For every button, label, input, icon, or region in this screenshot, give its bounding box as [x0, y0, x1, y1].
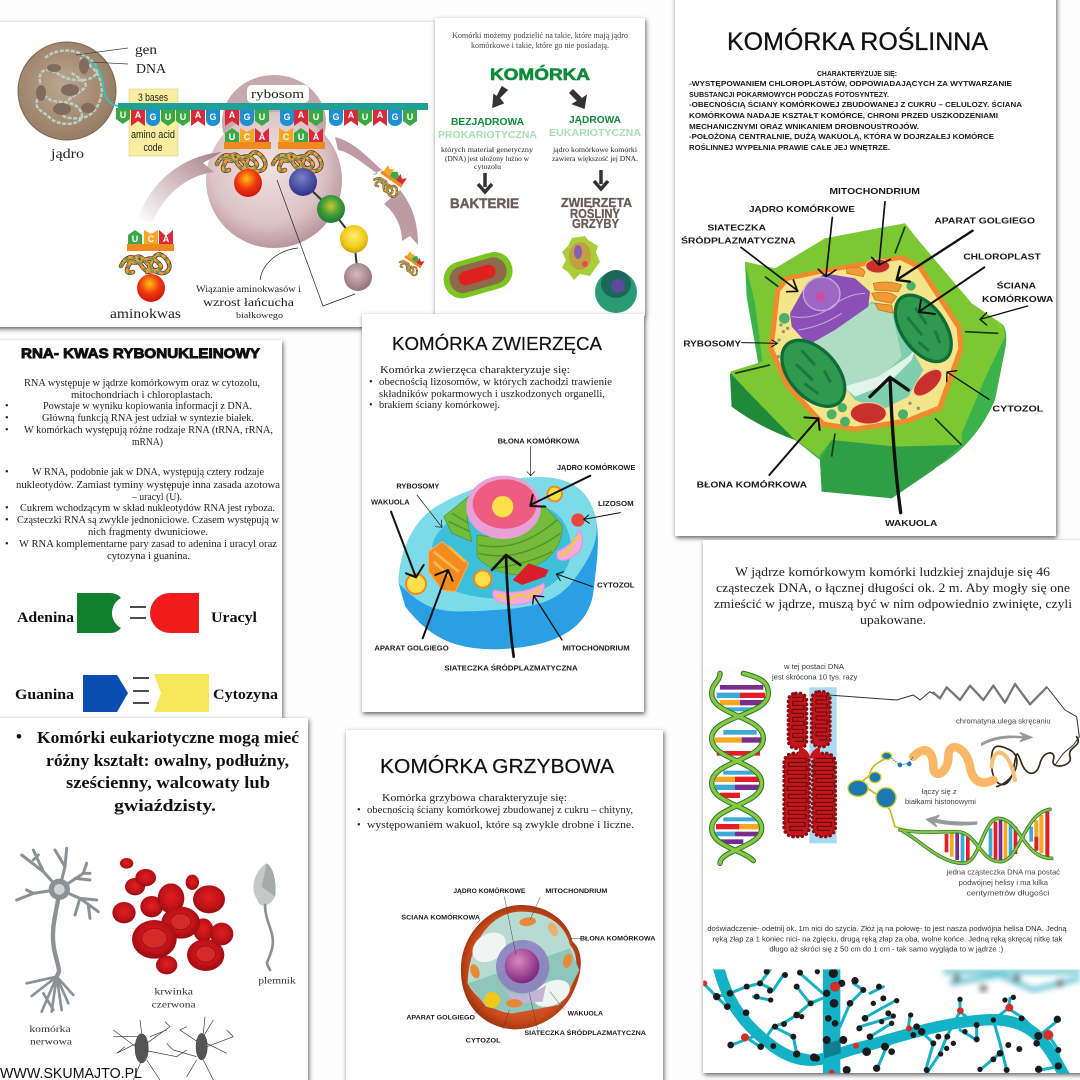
tRNA free amino acid [121, 230, 174, 302]
arrow: to bacteria [478, 173, 492, 192]
description: -POŁOŻONĄ CENTRALNIE, DUŻĄ WAKUOLĄ, KTÓRA W DOJRZAŁEJ KOMÓRCE [689, 132, 994, 141]
arrow: amino acid entering ribosome [138, 152, 222, 222]
organelle: vacuole light [808, 303, 902, 387]
text: experiment: długo aż skróci się z 50 cm do 1 cm - tak samo wygląda to w jądrze :) [769, 945, 1003, 954]
label: red blood cell: czerwona [152, 999, 197, 1010]
branch: eukaryotic: JĄDROWA [569, 115, 621, 126]
callout: chain bracket text [196, 180, 355, 320]
branch: prokaryotic: (DNA) jest ułożony luźno w [445, 154, 530, 163]
icon: sperm [253, 863, 276, 970]
organelle: golgi [484, 992, 500, 1008]
diagrams: cell types [17, 848, 296, 1080]
description: • [369, 377, 373, 388]
labels: SIATECZKA ŚRÓDPLAZMATYCZNA [444, 664, 578, 673]
branch: prokaryotic [438, 117, 537, 171]
label: rybosom: rybosom [251, 86, 304, 101]
panel: animal cell [362, 314, 644, 712]
diagram: fungal cell [401, 886, 656, 1045]
text: eukaryote groups: GRZYBY [572, 216, 619, 231]
text: RNA facts: W RNA, podobnie jak w DNA, występują cztery rodzaje [32, 467, 264, 478]
labels: BŁONA KOMÓRKOWA [498, 437, 580, 446]
text: RNA facts: • [5, 539, 9, 550]
label: chromatin: chromatyna ulega skręcaniu [956, 717, 1051, 726]
label: red blood cell [152, 987, 197, 1010]
icon: plant cell [562, 236, 600, 280]
callout: chain bracket text: Wiązanie aminokwasów i [196, 284, 302, 294]
description: Komórka grzybowa charakteryzuje się: [382, 793, 567, 804]
description: -WYSTĘPOWANIEM CHLOROPLASTÓW, ODPOWIADAJĄCYCH ZA WYTWARZANIE [689, 79, 1012, 88]
labels: WAKUOLA [885, 518, 938, 528]
mRNA strand: U [165, 112, 171, 122]
labels: CYTOZOL [466, 1038, 501, 1045]
tRNA free amino acid: U [132, 234, 138, 244]
text: RNA facts: cytozyna i guanina. [107, 551, 190, 562]
description: obecnością lizosomów, w których zachodzi trawienie [379, 377, 612, 388]
text: RNA facts: • [5, 413, 9, 424]
description: występowaniem wakuol, które są zwykle drobne i liczne. [367, 820, 634, 831]
labels: APARAT GOLGIEGO [374, 646, 449, 653]
mRNA strand: A [229, 110, 236, 120]
tRNA with amino acid in ribosome left [217, 128, 271, 197]
labels: CHLOROPLAST [963, 251, 1041, 261]
text: RNA facts: mRNA) [132, 437, 163, 448]
image: molecular model [701, 967, 1080, 1077]
organelle: lysosome [571, 513, 585, 527]
heading: RNA: RNA- KWAS RYBONUKLEINOWY [21, 345, 261, 361]
intro text: Komórki możemy podzielić na takie, które mają jądro [452, 31, 628, 40]
diagram: adenine uracil pair: Adenina [17, 610, 75, 626]
intro text: komórkowe i takie, które go nie posiadają. [471, 41, 609, 50]
branch: eukaryotic: jądro komórkowe komórki [552, 145, 637, 154]
callout: chain bracket text: białkowego [236, 311, 283, 320]
text: bakterie: BAKTERIE [450, 195, 519, 211]
callout: chain bracket text: wzrost łańcucha [203, 295, 295, 309]
icon: bacterium [439, 248, 517, 303]
diagram: guanine cytosine pair [15, 674, 279, 712]
label: double helix [946, 868, 1060, 897]
label: double helix: centymetrów długości [967, 888, 1050, 897]
diagram: adenine uracil pair [17, 593, 257, 633]
diagram: plant cell [681, 186, 1054, 528]
label: nerve cell [29, 1024, 73, 1048]
labels [371, 437, 636, 673]
organelle: nucleus [505, 949, 539, 983]
text: RNA facts: Cząsteczki RNA są zwykle jednoniciowe. Czasem występują w [17, 515, 279, 526]
heading: shapes [16, 727, 299, 815]
icon: green sphere cell [595, 270, 637, 313]
cytoplasm [468, 912, 576, 1013]
organelle: vacuole highlight [843, 350, 915, 397]
branch: prokaryotic: PROKARIOTYCZNA [438, 130, 537, 141]
mRNA strand: G [243, 112, 251, 122]
diagram: left double helix [712, 673, 768, 863]
organelle: chloroplast right [882, 283, 965, 374]
panel: RNA [0, 340, 282, 720]
text: RNA facts: RNA występuje w jądrze komórkowym oraz w cytozolu, [24, 378, 260, 389]
text: RNA facts [5, 378, 280, 562]
text: experiment: doświadczenie- odetnij ok. 1m nici do szycia. Złóż ją na połowę- to jest nasza podwójna helisa DNA. Jedną [707, 924, 1068, 933]
labels: KOMÓRKOWA [982, 293, 1054, 304]
tRNA with growing chain: U [298, 132, 304, 142]
callout: 3 bases [129, 89, 178, 156]
organelle: red ER stack [513, 563, 549, 585]
text: RNA facts: Główną funkcją RNA jest udział w syntezie białek. [42, 413, 254, 424]
mRNA strand: A [348, 110, 355, 120]
tRNA with amino acid in ribosome left: U [229, 132, 235, 142]
heading: shapes: • [16, 727, 22, 746]
labels: ŚCIANA KOMÓRKOWA [401, 912, 480, 921]
heading: shapes: Komórki eukariotyczne mogą mieć [37, 728, 299, 747]
mRNA strand: A [377, 110, 384, 120]
mRNA strand: G [283, 112, 291, 122]
icon: red blood cells [112, 858, 233, 974]
description: KOMÓRKOWA NADAJE KSZTAŁT KOMÓRCE, CHRONI PRZED USZKODZENIAMI [689, 111, 998, 120]
intro text [452, 31, 628, 50]
label: jądro: jądro [50, 147, 84, 162]
organelle: golgi [847, 267, 902, 313]
mRNA strand [90, 62, 428, 126]
description [689, 69, 1023, 152]
panel: eukaryotic cell shapes [0, 718, 308, 1080]
description: ROŚLINNEJ WYPEŁNIA PRAWIE CAŁE JEJ WNĘTRZE. [689, 143, 890, 152]
callout: 3 bases: code [144, 142, 162, 154]
arrow: tRNA leaving ribosome [335, 137, 425, 276]
title: KOMÓRKA GRZYBOWA [380, 755, 615, 778]
intro text [714, 564, 1072, 627]
label: gen and DNA: gen [135, 43, 157, 58]
panel: cell types [435, 18, 645, 316]
mRNA strand: G [332, 112, 340, 122]
mRNA strand: U [180, 112, 186, 122]
panel: protein synthesis [0, 22, 435, 327]
description: • [357, 820, 361, 831]
callout: 3 bases: amino acid [131, 129, 175, 141]
arrow: histone binding [927, 815, 977, 827]
label: sperm: plemnik [258, 976, 296, 987]
text: RNA facts: nukleotydów. Zamiast tyminy występuje inna zasada azotowa [16, 480, 280, 491]
text: RNA facts: W RNA komplementarne pary zasad to adenina i uracyl oraz [19, 539, 277, 550]
title: KOMÓRKA ZWIERZĘCA [392, 333, 603, 354]
description: • [369, 400, 373, 411]
labels: CYTOZOL [597, 583, 635, 590]
labels: APARAT GOLGIEGO [406, 1014, 475, 1021]
heading: komórka: KOMÓRKA [490, 65, 590, 84]
description: • [357, 805, 361, 816]
organelle: mitochondria [850, 259, 946, 424]
labels: SIATECZKA [707, 222, 767, 232]
panel: fungal cell [346, 730, 663, 1080]
label: histones: łączy się z [922, 787, 957, 796]
labels: MITOCHONDRIUM [562, 646, 630, 653]
organelle: golgi [429, 542, 469, 592]
labels: MITOCHONDRIUM [829, 186, 920, 196]
branch: eukaryotic: zawiera większość jej DNA. [552, 154, 638, 163]
intro text: W jądrze komórkowym komórki ludzkiej znajduje się 46 [735, 564, 1051, 579]
diagram: lower helix [900, 809, 1052, 863]
labels: RYBOSOMY [683, 339, 741, 349]
labels: ŚCIANA [997, 279, 1037, 290]
label: rybosom [247, 85, 309, 103]
organelle: wall spikes [735, 227, 998, 457]
labels: BŁONA KOMÓRKOWA [697, 479, 808, 490]
diagram: guanine cytosine pair: Guanina [15, 687, 75, 703]
description [357, 793, 634, 831]
mRNA strand: A [195, 110, 202, 120]
description: brakiem ściany komórkowej. [379, 400, 500, 411]
panel: plant cell [675, 0, 1056, 536]
description: obecnością ściany komórkowej zbudowanej z cukru – chityny, [367, 805, 633, 816]
label: shortened DNA: w tej postaci DNA [783, 662, 844, 671]
organelle: chloroplast left [767, 326, 859, 421]
branch: prokaryotic: cytozolu [474, 162, 501, 171]
text: RNA facts: • [5, 401, 9, 412]
labels: CYTOZOL [992, 404, 1044, 414]
label: nerve cell: nerwowa [30, 1037, 73, 1048]
label: histones: białkami histonowymi [905, 797, 976, 806]
text: RNA facts: • [5, 467, 9, 478]
organelle: ER [444, 495, 562, 575]
heading: shapes: gwiaździsty. [114, 796, 216, 815]
tRNA with growing chain [273, 128, 372, 291]
mRNA strand: G [209, 112, 217, 122]
ribosome body [206, 75, 342, 248]
mRNA strand: U [120, 110, 126, 120]
mRNA strand: U [407, 112, 413, 122]
diagram: DNA packaging [701, 662, 1080, 1077]
organelle: nucleus [790, 273, 870, 345]
branch: eukaryotic: EUKARIOTYCZNA [549, 128, 641, 139]
text: eukaryote groups: ZWIERZĘTA [561, 195, 633, 210]
arrow: right branch [570, 90, 586, 108]
cytoplasm shade [468, 948, 579, 1013]
description: MECHANICZNYMI ORAZ WNIKANIEM DROBNOUSTROJÓW. [689, 122, 919, 131]
organelle: vacuole [808, 302, 923, 410]
title: KOMÓRKA ROŚLINNA [727, 26, 988, 56]
description [369, 365, 612, 411]
label: gen and DNA [76, 43, 167, 77]
leader lines [474, 897, 581, 1029]
text: RNA facts: W komórkach występują różne rodzaje RNA (tRNA, rRNA, [24, 425, 273, 436]
labels: SIATECZKA ŚRÓDPLAZMATYCZNA [524, 1028, 646, 1037]
diagram: chromatin coil [828, 683, 1079, 787]
arrow: left branch [493, 87, 507, 107]
labels: JĄDRO KOMÓRKOWE [557, 463, 636, 472]
text: eukaryote groups [561, 195, 633, 231]
mRNA strand: A [135, 110, 142, 120]
tRNA free amino acid: A [163, 234, 170, 244]
labels [681, 186, 1054, 528]
organelle: ER folds [501, 985, 546, 1003]
description: Komórka zwierzęca charakteryzuje się: [380, 365, 570, 376]
text: RNA facts: • [5, 515, 9, 526]
text: RNA facts: • [5, 425, 9, 436]
branch: eukaryotic [549, 115, 641, 163]
diagram: guanine cytosine pair: Cytozyna [213, 687, 279, 703]
labels: MITOCHONDRIUM [545, 888, 607, 895]
label: double helix: jedna cząsteczka DNA ma postać [946, 868, 1060, 877]
cell body [399, 477, 598, 649]
text: RNA facts: Powstaje w wyniku kopiowania informacji z DNA. [43, 401, 252, 412]
organelle: nucleus [466, 476, 541, 539]
highlight band [809, 687, 837, 843]
description: składników pokarmowych i uszkodzonych organelli, [379, 389, 605, 400]
label: histones [905, 787, 976, 806]
mRNA strand: G [391, 112, 399, 122]
diagram: chromosome [784, 692, 835, 837]
mRNA strand: U [259, 112, 265, 122]
label: double helix: podwójnej helisy i ma kilka [959, 878, 1049, 887]
diagram: nucleosomes [848, 752, 913, 832]
mRNA strand: U [313, 112, 319, 122]
panel: DNA packaging [701, 540, 1080, 1077]
diagram: animal cell [371, 437, 636, 673]
branch: prokaryotic: których materiał genetyczny [441, 145, 533, 154]
cytoplasm and membrane [768, 255, 963, 432]
labels: ŚRÓDPLAZMATYCZNA [681, 235, 797, 246]
labels: RYBOSOMY [396, 484, 440, 491]
diagram: adenine uracil pair: Uracyl [211, 610, 257, 626]
icon: star-shaped cells [113, 1017, 233, 1080]
labels: WAKUOLA [568, 1011, 603, 1018]
text: experiment [707, 924, 1068, 954]
tRNA with amino acid in ribosome left: C [244, 132, 251, 142]
labels: JĄDRO KOMÓRKOWE [453, 886, 525, 895]
arrows: labels to organelles [741, 202, 1028, 513]
labels [401, 886, 656, 1045]
labels: APARAT GOLGIEGO [934, 215, 1035, 225]
organelle: ER stacks [449, 513, 560, 568]
label: aminokwas: aminokwas [110, 307, 181, 322]
organelle: vacuoles [467, 926, 574, 1012]
label: red blood cell: krwinka [154, 987, 194, 998]
tRNA with growing chain: C [283, 132, 290, 142]
heading: shapes: sześcienny, walcowaty lub [66, 773, 270, 792]
labels: BŁONA KOMÓRKOWA [580, 933, 656, 942]
organelle: mitochondria [493, 530, 582, 605]
mRNA strand: U [362, 112, 368, 122]
text: eukaryote groups: ROŚLINY [570, 206, 620, 221]
cell wall [461, 905, 581, 1029]
label: shortened DNA: jest skrócona 10 tys. razy [771, 672, 858, 681]
description: CHARAKTERYZUJE SIĘ: [817, 69, 897, 78]
tRNA with growing chain: A [313, 132, 320, 142]
description: SUBSTANCJI POKARMOWYCH PODCZAS FOTOSYNTEZY. [689, 90, 889, 99]
text: RNA facts: Cukrem wchodzącym w skład nukleotydów RNA jest ryboza. [20, 503, 275, 514]
text: RNA facts: • [5, 503, 9, 514]
arrows [391, 447, 620, 657]
intro text: zmieścić w jądrze, muszą być w nim odpowiednio zwinięte, czyli [714, 596, 1072, 611]
label: gen and DNA: DNA [136, 62, 167, 77]
label: shortened DNA [771, 662, 858, 681]
heading: shapes: różny kształt: owalny, podłużny, [46, 751, 289, 770]
text: RNA facts: nich fragmenty dwuniciowe. [88, 527, 208, 538]
branch: prokaryotic: BEZJĄDROWA [451, 117, 524, 128]
labels: WAKUOLA [371, 500, 410, 507]
label: nerve cell: komórka [29, 1024, 72, 1035]
icon: cell nucleus [18, 42, 116, 140]
labels: JĄDRO KOMÓRKOWE [749, 203, 855, 214]
organelle: ribosome balls [777, 281, 920, 427]
mRNA strand: G [149, 112, 157, 122]
callout: 3 bases: 3 bases [138, 92, 168, 104]
cell wall [730, 223, 1006, 498]
organelle: mitochondria [468, 916, 574, 1008]
text: RNA facts: – uracyl (U). [131, 492, 182, 503]
text: RNA facts: mitochondriach i chloroplastach. [71, 390, 213, 401]
labels: LIZOSOM [598, 501, 634, 508]
arrow: twisting [982, 733, 1032, 745]
description: -OBECNOŚCIĄ ŚCIANY KOMÓRKOWEJ ZBUDOWANEJ Z CUKRU – CELULOZY. ŚCIANA [689, 100, 1023, 109]
tRNA with amino acid in ribosome left: A [259, 132, 266, 142]
tRNA free amino acid: C [148, 234, 155, 244]
organelle: vesicles [406, 487, 562, 594]
organelle: ER ring [496, 940, 549, 993]
intro text: upakowane. [860, 612, 926, 627]
icon: nerve cell [17, 848, 98, 1012]
intro text: cząsteczek DNA, o łącznej długości ok. 2 m. Aby mogły się one [716, 580, 1070, 595]
arrow: to eukaryotes [594, 170, 608, 189]
mRNA strand: A [298, 110, 305, 120]
text: experiment: ręką złap za 1 koniec nici- na zgięciu, drugą ręką złap za oba, wolne końce. Jedną ręką skręcaj nitkę tak [713, 934, 1063, 943]
